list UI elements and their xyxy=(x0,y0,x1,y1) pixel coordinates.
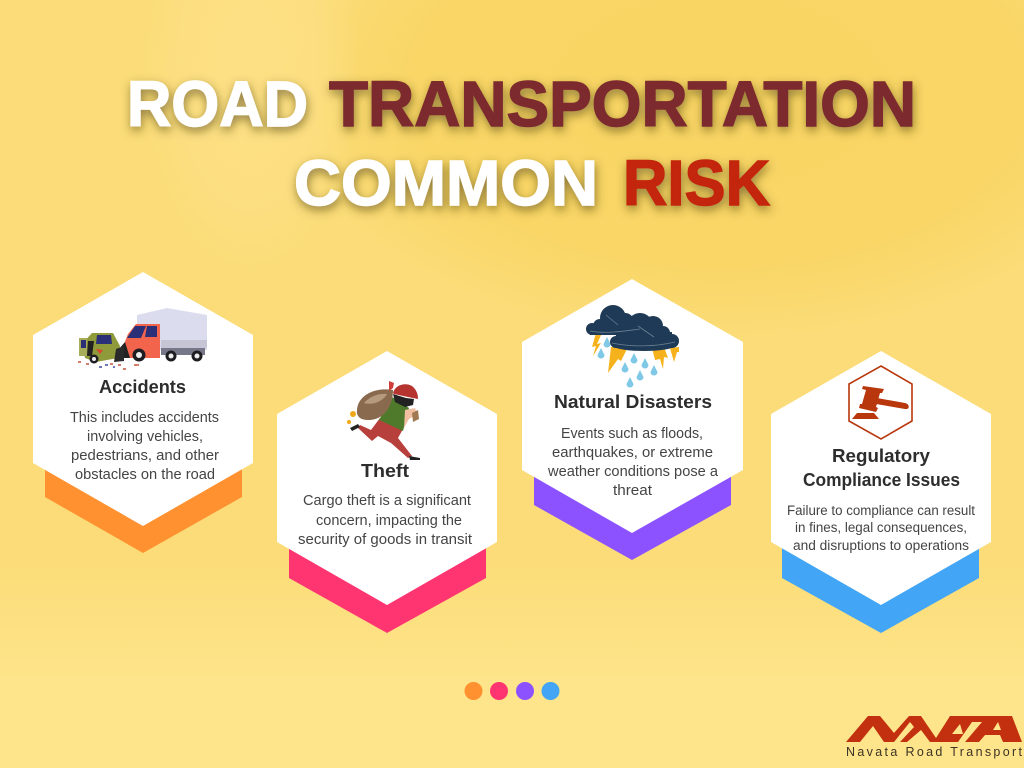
purple chevron xyxy=(534,470,731,560)
title word: RISK: RISK xyxy=(623,147,770,219)
panel: theft xyxy=(277,351,497,633)
orange chevron xyxy=(45,460,242,553)
body text: threat xyxy=(613,483,652,499)
body text: This includes accidents xyxy=(70,410,219,426)
pink chevron xyxy=(289,540,486,633)
heading: Natural Disasters xyxy=(554,391,712,412)
icon: storm clouds xyxy=(586,305,679,388)
body text: Failure to compliance can result xyxy=(787,503,975,518)
panel: accidents xyxy=(33,272,253,553)
icon: running thief xyxy=(347,381,420,460)
white hexagon xyxy=(771,351,991,605)
body text: concern, impacting the xyxy=(316,513,462,529)
body text: security of goods in transit xyxy=(298,532,472,548)
icon: crashed car and truck xyxy=(78,308,207,369)
blue chevron xyxy=(782,540,979,633)
white hexagon xyxy=(33,272,253,526)
title word: TRANSPORTATION: TRANSPORTATION xyxy=(329,68,916,140)
heading: Regulatory xyxy=(832,445,931,466)
logo caption: Navata Road Transport xyxy=(846,745,1023,759)
title word: ROAD: ROAD xyxy=(127,68,308,140)
panel: natural disasters xyxy=(522,279,743,560)
title xyxy=(127,68,916,219)
white hexagon xyxy=(277,351,497,605)
body text: obstacles on the road xyxy=(75,467,215,483)
title word: COMMON: COMMON xyxy=(294,147,598,219)
body text: earthquakes, or extreme xyxy=(552,445,713,461)
icon: gavel in hexagon xyxy=(849,366,912,439)
logo: Navata xyxy=(846,716,1023,759)
heading: Compliance Issues xyxy=(803,469,960,490)
body text: involving vehicles, xyxy=(87,429,203,445)
body text: in fines, legal consequences, xyxy=(795,520,967,535)
body text: and disruptions to operations xyxy=(793,538,969,553)
body text: weather conditions pose a xyxy=(547,464,719,480)
heading: Accidents xyxy=(99,376,186,397)
body text xyxy=(787,503,975,553)
body text: Cargo theft is a significant xyxy=(303,493,471,509)
white hexagon xyxy=(522,279,743,533)
body text xyxy=(547,426,719,499)
body text xyxy=(298,493,472,548)
logo mark xyxy=(846,716,1022,742)
heading: Theft xyxy=(361,460,409,481)
panel: regulatory compliance xyxy=(771,351,991,633)
pagination dots xyxy=(464,682,560,700)
body text: Events such as floods, xyxy=(561,426,703,442)
body text xyxy=(70,410,219,483)
body text: pedestrians, and other xyxy=(71,448,219,464)
heading xyxy=(803,445,960,490)
